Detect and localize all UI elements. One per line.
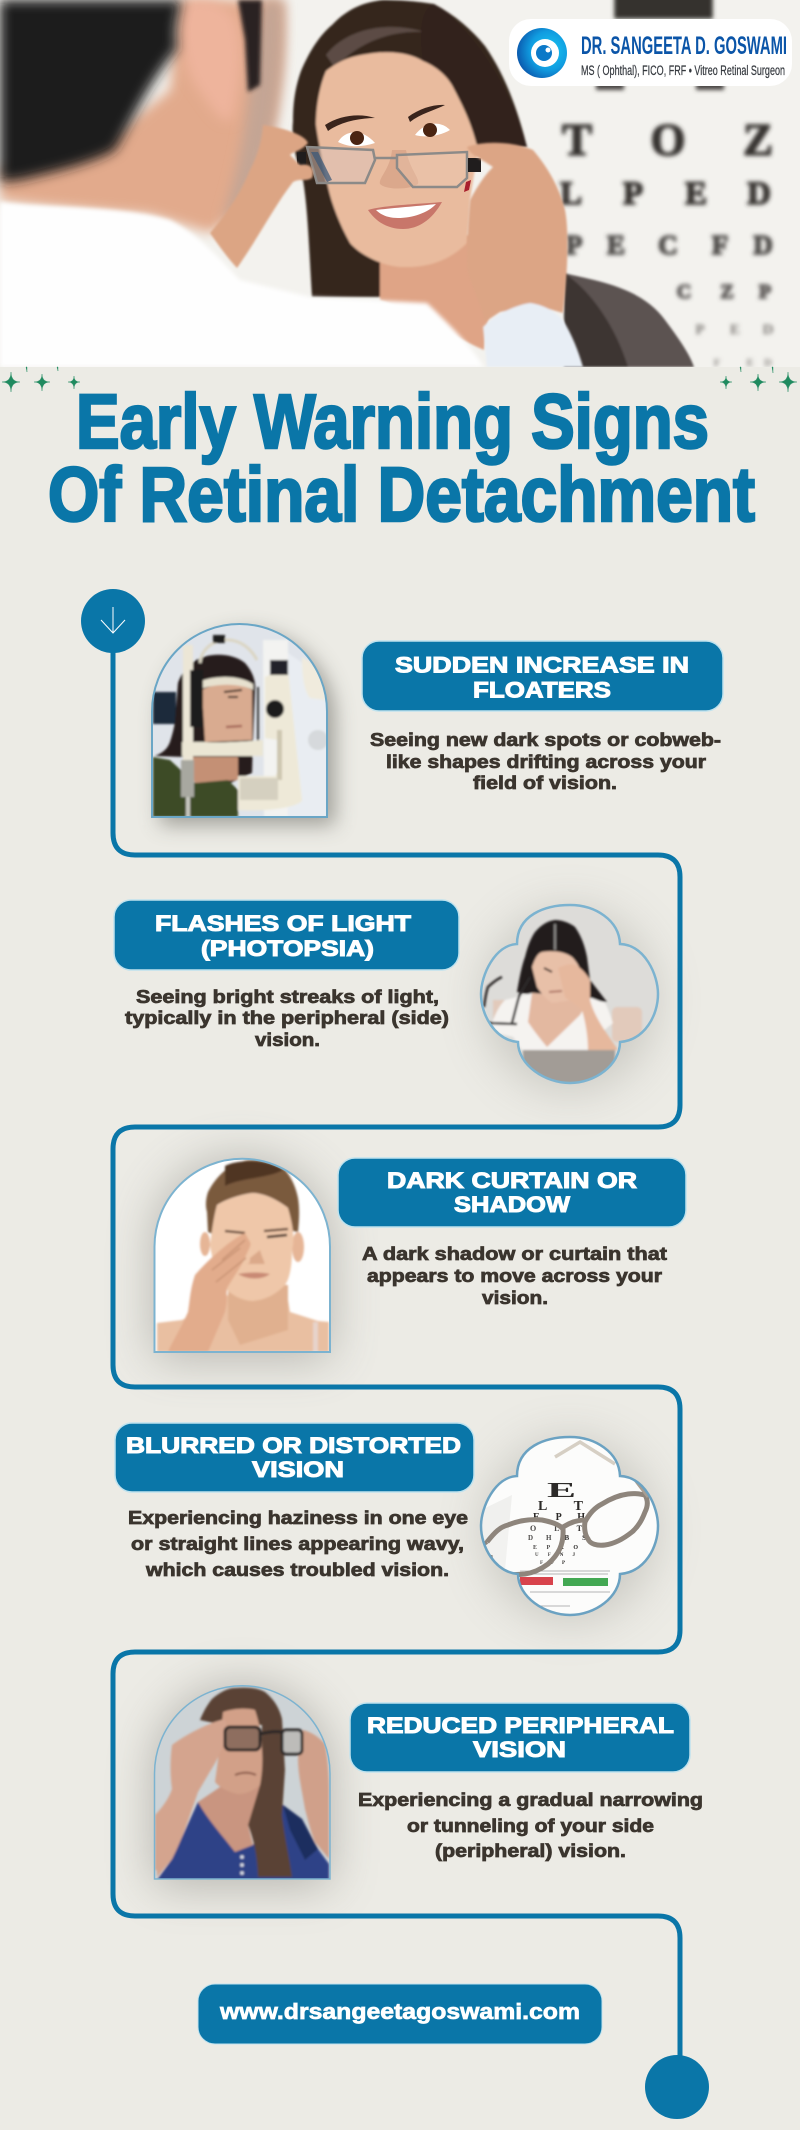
heading pill — [338, 1158, 686, 1227]
photo: glasses on eye chart: E P H — [533, 1512, 585, 1523]
glasses — [307, 147, 467, 187]
photo: young woman rubbing eye — [154, 1159, 330, 1352]
eye chart letters: P — [759, 281, 771, 303]
body text: vision. — [482, 1288, 548, 1308]
heading pill: VISION — [473, 1737, 566, 1762]
photo: glasses on eye chart: F F P — [540, 1561, 565, 1566]
body text — [362, 1244, 667, 1308]
eye chart letters: C — [677, 281, 691, 303]
doctor: hand — [210, 125, 313, 268]
photo: glasses on eye chart: E P R O — [533, 1545, 578, 1551]
title: Early Warning Signs — [76, 379, 709, 465]
doctor: hair, skin and neck — [0, 0, 284, 233]
photo: glasses on eye chart: O L T — [530, 1524, 583, 1533]
eye chart letters: E — [746, 357, 754, 369]
photo: glasses on eye chart: D H B S — [528, 1534, 586, 1542]
photo: glasses on eye chart: L T — [538, 1499, 584, 1514]
patient: sweater and back hair — [293, 0, 694, 367]
eye chart letters: D — [764, 357, 772, 369]
icon: down arrow — [101, 607, 125, 633]
body text: typically in the peripheral (side) — [125, 1008, 449, 1028]
step 2: flashes of light — [114, 900, 659, 1085]
photo: glasses on eye chart — [478, 1437, 659, 1615]
body text: Seeing bright streaks of light, — [136, 987, 439, 1007]
body text: vision. — [255, 1030, 320, 1050]
eye chart letters: F — [714, 357, 721, 369]
eye chart letters: E — [685, 176, 707, 212]
heading pill: FLASHES OF LIGHT — [155, 911, 412, 936]
eye chart letters: T — [562, 115, 592, 165]
eye chart letters: P — [623, 176, 643, 212]
photo: woman with eye strain at laptop — [481, 905, 659, 1085]
step 3: dark curtain or shadow — [154, 1158, 686, 1352]
website pill: www.drsangeetagoswami.com — [219, 1999, 580, 2024]
body text: Seeing new dark spots or cobweb- — [370, 730, 721, 750]
body text: or straight lines appearing wavy, — [131, 1534, 464, 1554]
heading pill — [362, 641, 723, 711]
eye chart letters: P — [566, 230, 582, 260]
body text: or tunneling of your side — [407, 1816, 654, 1836]
heading pill: FLOATERS — [473, 678, 611, 702]
body text: which causes troubled vision. — [145, 1560, 449, 1580]
heading pill — [350, 1703, 690, 1772]
body text: (peripheral) vision. — [435, 1841, 626, 1861]
title — [48, 379, 755, 538]
timeline connector path — [113, 621, 680, 2087]
body text: Experiencing haziness in one eye — [128, 1508, 468, 1528]
eye chart letters: P — [695, 322, 705, 338]
eye chart letters: F — [712, 230, 728, 260]
eye chart letters: Z — [743, 115, 773, 165]
heading pill: REDUCED PERIPHERAL — [367, 1713, 674, 1738]
heading pill: VISION — [252, 1457, 344, 1482]
heading pill — [114, 900, 459, 970]
website pill — [198, 1984, 602, 2044]
heading pill: BLURRED OR DISTORTED — [126, 1433, 461, 1458]
step 5: reduced peripheral vision — [154, 1686, 703, 1880]
patient: facial features — [297, 105, 481, 229]
eye chart letters: E — [730, 322, 740, 338]
eye chart letters: D — [747, 176, 771, 212]
body text: Experiencing a gradual narrowing — [358, 1790, 703, 1810]
heading pill: SUDDEN INCREASE IN — [395, 652, 689, 678]
eye chart letters: L — [560, 176, 582, 212]
logo badge — [509, 19, 792, 86]
heading pill: DARK CURTAIN OR — [387, 1168, 637, 1193]
eye chart letters: C — [658, 230, 678, 260]
eye chart letters: O — [650, 115, 686, 165]
eye chart letters: D — [763, 322, 774, 338]
doctor: white coat — [0, 202, 484, 367]
body text — [125, 987, 449, 1050]
icon: eye logo — [517, 28, 567, 78]
photo: glasses on eye chart: U F N J — [535, 1553, 576, 1558]
heading pill: (PHOTOPSIA) — [201, 936, 374, 961]
end circle — [645, 2055, 709, 2119]
patient: hand and white cuff — [467, 143, 583, 367]
photo: slit lamp eye exam — [152, 624, 328, 817]
eye chart letters: E — [607, 230, 625, 260]
body text — [128, 1508, 468, 1580]
eye chart letters: Z — [720, 281, 734, 303]
eye chart letters — [560, 0, 774, 369]
decorative stars — [2, 367, 797, 392]
heading pill — [115, 1423, 474, 1492]
start circle with down arrow — [81, 589, 145, 653]
photo: woman adjusting glasses — [154, 1686, 330, 1880]
hero photo: doctor fitting glasses on patient — [0, 0, 800, 369]
body text: field of vision. — [473, 773, 617, 793]
step 1: sudden increase in floaters — [152, 624, 723, 817]
body text: like shapes drifting across your — [386, 752, 706, 772]
body text: A dark shadow or curtain that — [362, 1244, 667, 1264]
body text: appears to move across your — [367, 1266, 662, 1286]
step 4: blurred or distorted vision — [115, 1423, 659, 1615]
body text — [370, 730, 721, 793]
body text — [358, 1790, 703, 1861]
photo: glasses on eye chart: E — [547, 1478, 576, 1502]
soft shadows behind photos — [154, 632, 655, 1885]
heading pill: SHADOW — [454, 1192, 570, 1217]
eye chart letters: D — [753, 230, 773, 260]
